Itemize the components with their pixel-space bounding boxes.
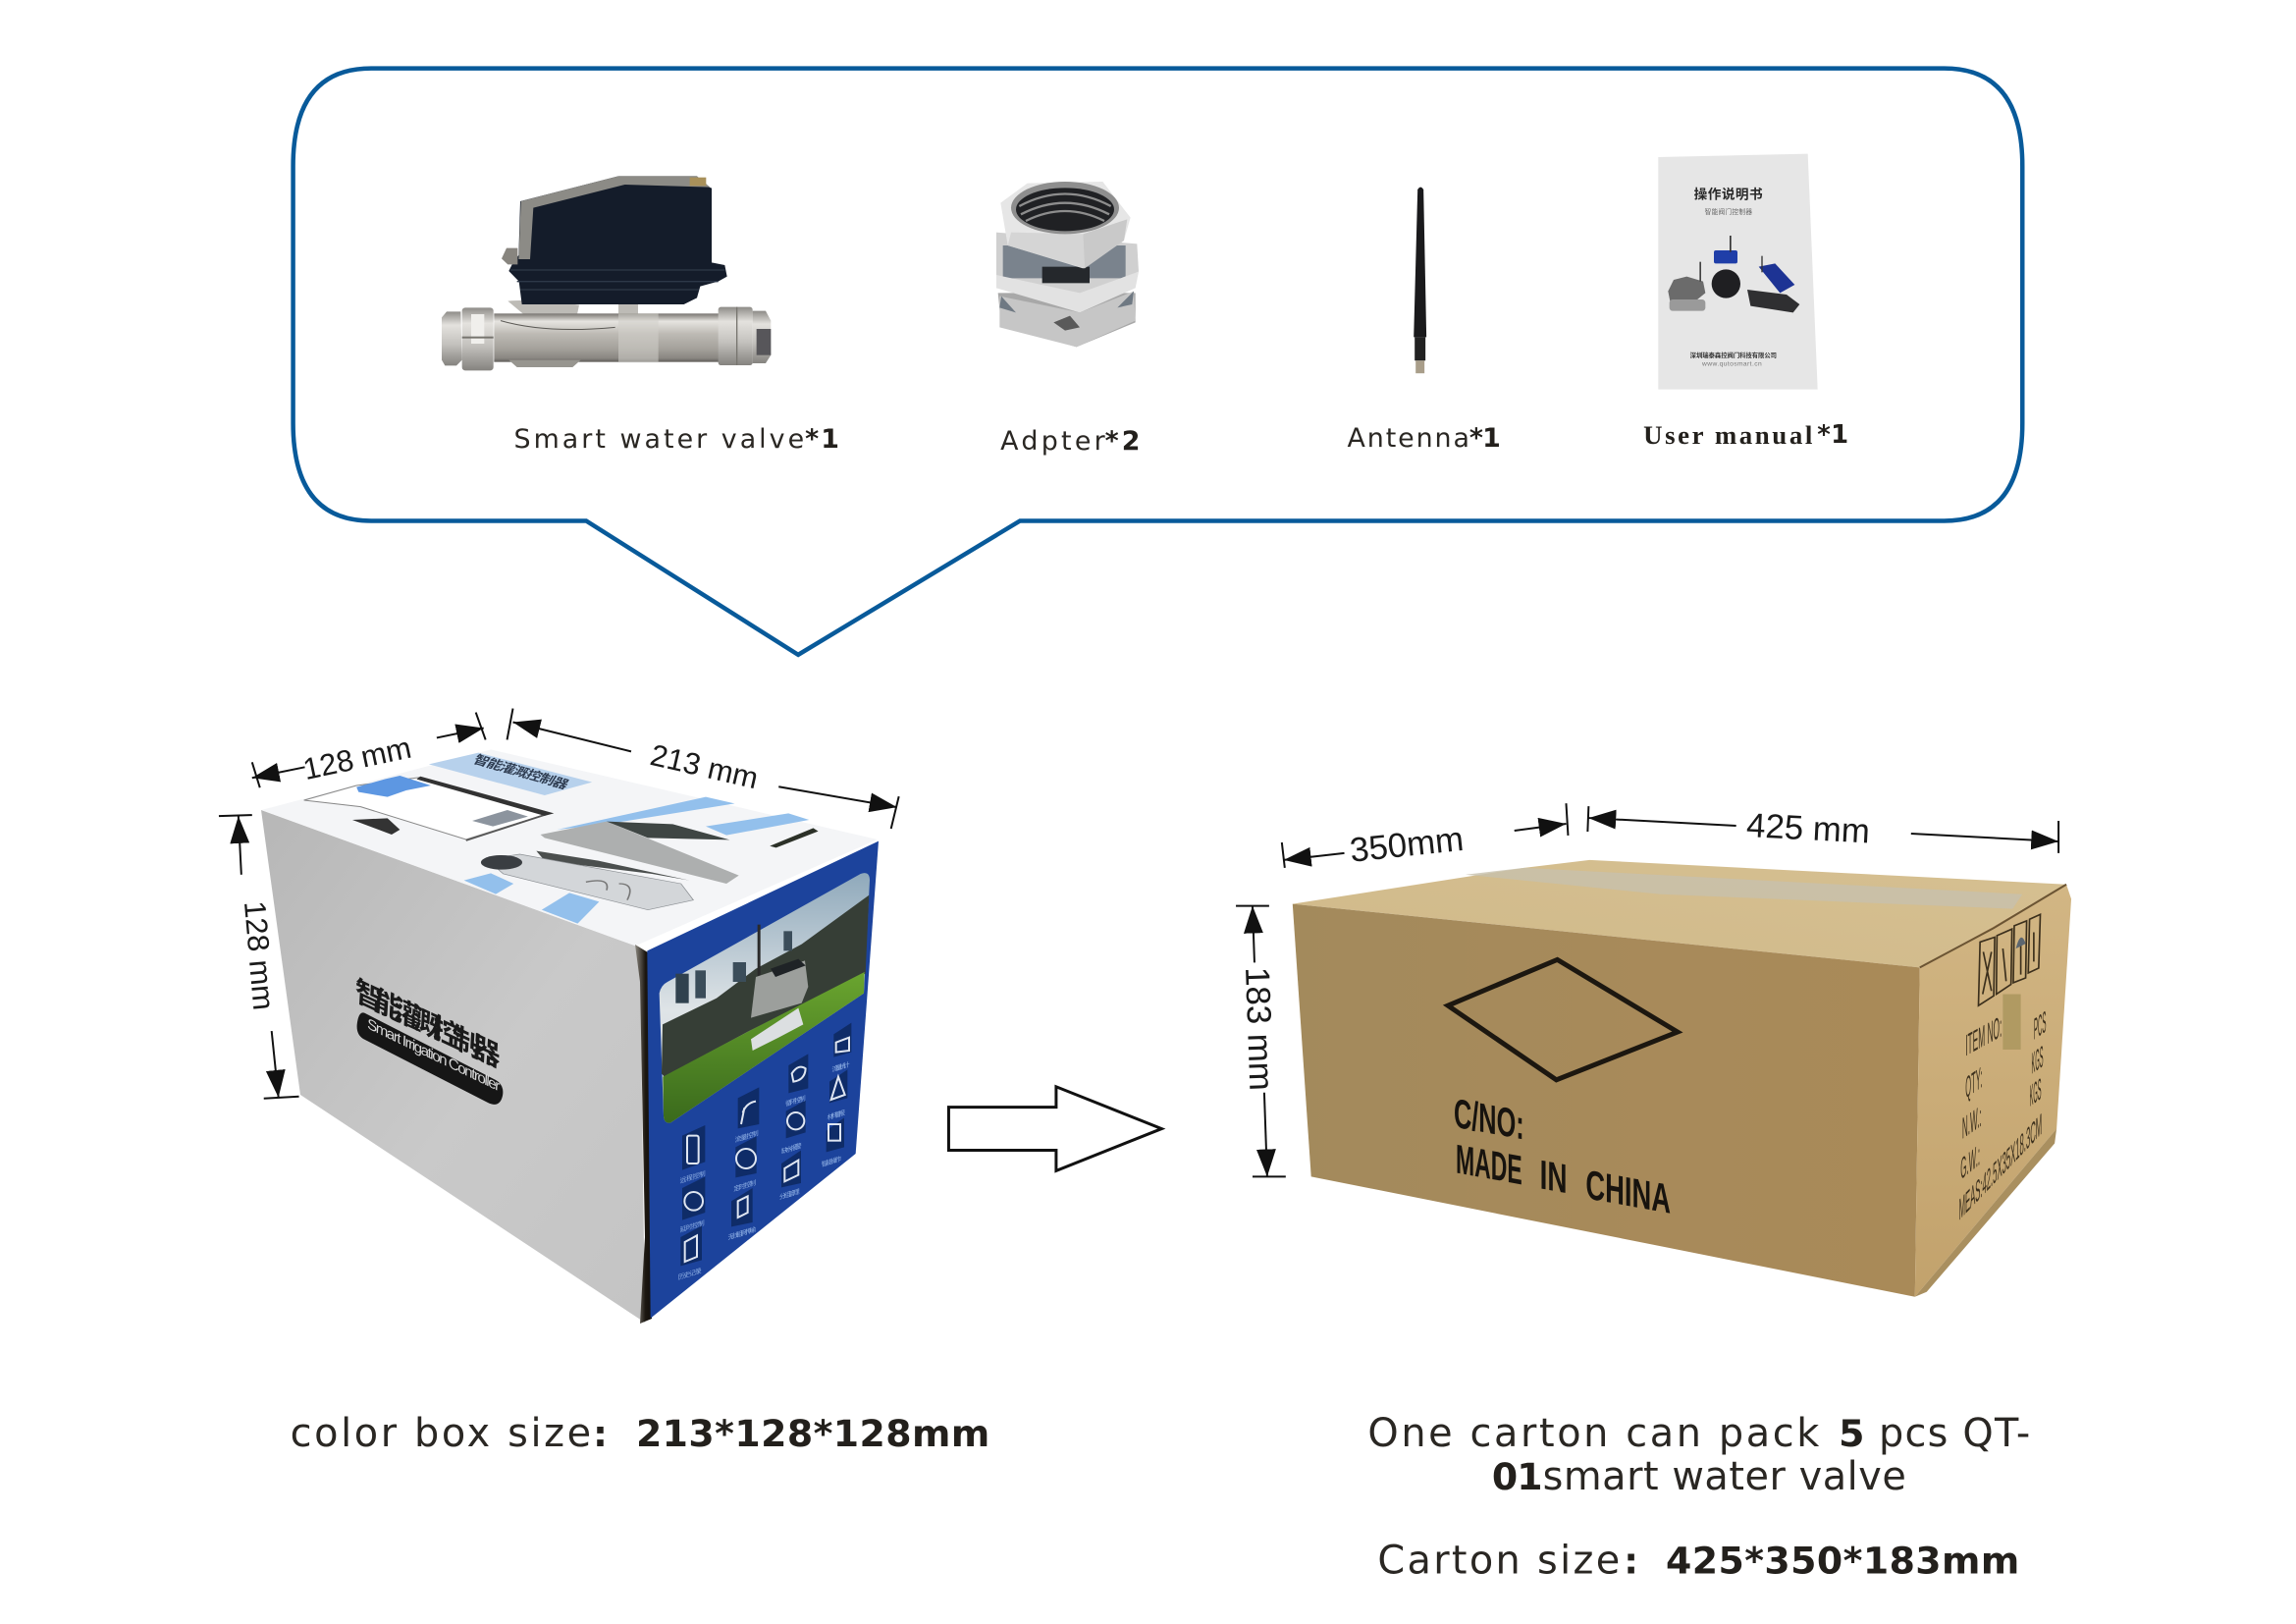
box blue side panel: 定时控制 (733, 1178, 756, 1193)
icon: user manual (1658, 154, 1818, 390)
carton side markings: ITEM NO: (1965, 1008, 2002, 1062)
carton right face (1915, 885, 2071, 1297)
caption: carton pack quantity: One carton can pack (1367, 1411, 1819, 1456)
caption: carton pack quantity: pcs QT- (1879, 1411, 2030, 1456)
box left gray face (261, 810, 645, 1323)
box blue side panel: 材料警报 (828, 1108, 845, 1122)
carton printed text: C/NO: (1454, 1090, 1524, 1148)
dimensions: color box: 213 mm (647, 737, 762, 795)
label: antenna: Antenna (1348, 423, 1469, 454)
box blue side panel (647, 841, 879, 1319)
dimensions: carton (1236, 803, 2058, 1176)
carton printed text: MADE (1456, 1136, 1522, 1193)
carton top (1293, 860, 2066, 967)
carton printed text: IN (1540, 1152, 1567, 1202)
caption: color box size: : (593, 1413, 608, 1455)
icon: user manual: 操作说明书 (1694, 187, 1763, 202)
icon: adapter fitting (996, 182, 1139, 347)
box blue side panel: 流量控制 (735, 1128, 759, 1144)
label: adapter: Adpter (1000, 426, 1106, 457)
carton printed text (1454, 1090, 1671, 1222)
label: user manual: *1 (1817, 420, 1848, 450)
label: adapter: *2 (1105, 426, 1141, 457)
infographic canvas: MEAS:42.5X35X18.3CM (1959, 1108, 2042, 1227)
box blue side panel: 无线组网传输 (728, 1224, 756, 1242)
caption: carton pack quantity (1367, 1411, 2030, 1499)
label: user manual: User manual (1643, 420, 1812, 450)
photo: shipping carton (1293, 860, 2071, 1297)
label: smart water valve: *1 (805, 424, 839, 455)
caption: carton size: 425*350*183mm (1666, 1539, 2019, 1582)
box printed name: Smart Irrigation Controller (367, 1016, 501, 1096)
label: smart water valve: Smart water valve (514, 424, 804, 455)
carton side markings: N.W.: (1962, 1099, 1982, 1146)
box top face: 智能灌溉控制器 (470, 752, 571, 792)
caption: color box size (291, 1411, 989, 1456)
box blue side panel: 缺水报警 (781, 1141, 802, 1156)
carton printed text: CHINA (1585, 1162, 1671, 1222)
box blue side panel: 循环控制 (785, 1094, 806, 1109)
box blue side panel: 分组管理 (779, 1187, 800, 1202)
caption: carton pack quantity: 01 (1492, 1455, 1543, 1498)
box top face (261, 749, 878, 946)
dimensions: color box (219, 709, 899, 1099)
dimensions: carton: 350mm (1348, 820, 1466, 870)
photo: shipping carton: PCS (2034, 1004, 2046, 1047)
dimensions: color box: 128 mm (300, 731, 414, 786)
carton side markings (1959, 914, 2046, 1227)
icon: user manual: www.qutosmart.cn (1701, 361, 1762, 368)
icon: user manual: 智能阀门控制器 (1705, 207, 1752, 216)
box blue side panel: 远程控制 (680, 1168, 706, 1185)
caption: carton size: Carton size (1377, 1538, 1620, 1583)
icon: smart water valve (442, 176, 771, 370)
dimensions: color box: 128 mm (238, 899, 281, 1011)
caption: carton pack quantity: smart water valve (1543, 1454, 1906, 1499)
dimensions: carton: 183 mm (1238, 966, 1280, 1091)
box dark fold edge (635, 945, 656, 1324)
caption: color box size: color box size (291, 1411, 591, 1456)
photo: shipping carton: KGS (2032, 1040, 2044, 1081)
photo: color box (261, 749, 879, 1324)
caption: carton pack quantity: 5 (1839, 1412, 1864, 1455)
caption: carton size: : (1624, 1540, 1638, 1582)
label: antenna: *1 (1469, 423, 1501, 454)
icon: user manual: 深圳瑞泰森控阀门科技有限公司 (1690, 351, 1777, 359)
photo: shipping carton: KGS (2030, 1072, 2042, 1113)
caption: color box size: 213*128*128mm (636, 1412, 989, 1455)
dimensions: carton: 425 mm (1745, 806, 1871, 851)
panel: speech bubble of included items (294, 69, 2022, 655)
caption: carton size (1377, 1538, 2019, 1583)
box blue side panel: 历史记录 (678, 1266, 702, 1281)
box blue side panel: 流量统计 (831, 1059, 850, 1074)
carton front face (1293, 904, 1920, 1297)
box printed name: 智能灌溉控制器 (354, 974, 502, 1074)
carton diamond mark (1448, 959, 1678, 1080)
carton side markings: QTY: (1965, 1060, 1982, 1106)
box blue side panel: 智能操作 (822, 1154, 842, 1168)
box blue side panel: 延时控制 (680, 1218, 705, 1234)
carton tape (1466, 868, 2022, 909)
arrow: color box to carton (948, 1087, 1161, 1170)
icon: antenna (1414, 188, 1426, 373)
carton side markings: G.W.: (1960, 1138, 1980, 1187)
